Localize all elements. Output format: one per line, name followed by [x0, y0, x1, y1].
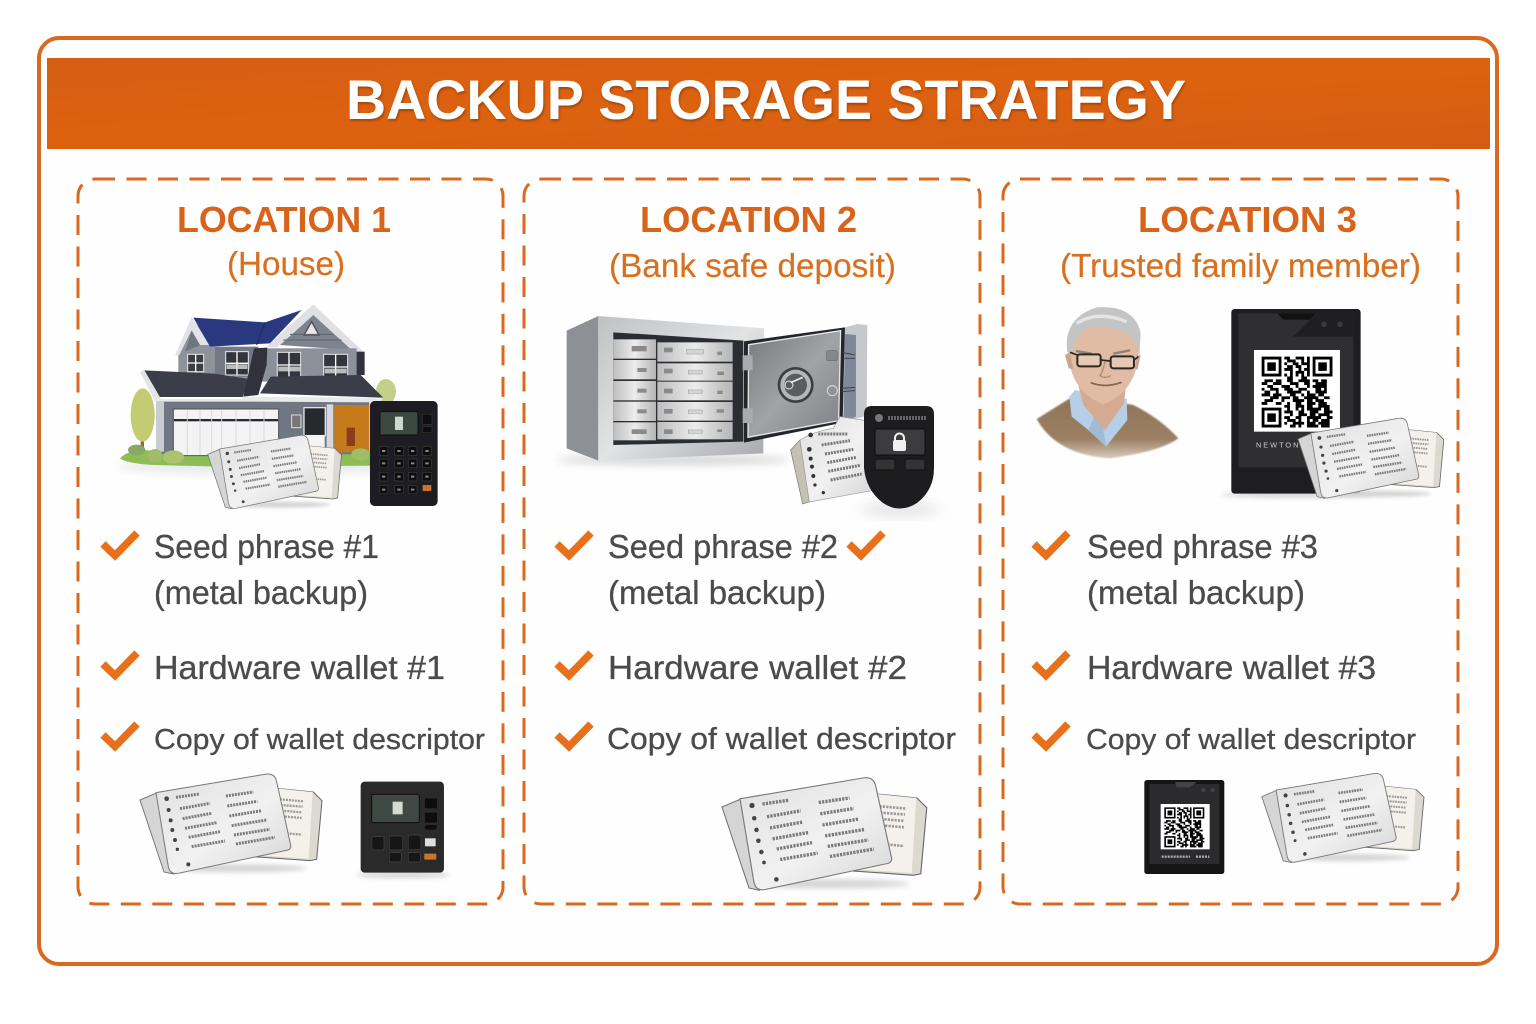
icon: seed phrase card	[1298, 418, 1444, 498]
item: hardware wallet 3: Hardware wallet #3	[1087, 649, 1376, 686]
check	[103, 653, 137, 676]
illustration: house	[117, 304, 403, 475]
icon: hardware wallet keypad	[370, 401, 438, 506]
panel: location 2	[524, 179, 980, 904]
item: seed phrase 2: Seed phrase #2	[608, 528, 838, 565]
device label: NEWTON	[1256, 441, 1300, 450]
icon: hardware wallet small	[357, 782, 450, 878]
heading: location 3: LOCATION 3	[1138, 199, 1357, 240]
extra check	[849, 533, 883, 556]
icon: seed phrase card	[208, 435, 341, 509]
heading: location 1: LOCATION 1	[177, 199, 391, 240]
check	[103, 533, 137, 556]
check	[1034, 724, 1068, 746]
item: hardware wallet 1: Hardware wallet #1	[154, 649, 445, 686]
item note: (metal backup)	[154, 574, 368, 611]
icon: descriptor pages	[140, 774, 322, 874]
icon: descriptor pages	[722, 778, 927, 890]
illustration: safe	[557, 316, 867, 465]
check	[557, 533, 591, 556]
panel: location 3	[1003, 179, 1458, 904]
item: hardware wallet 2: Hardware wallet #2	[608, 649, 907, 686]
check	[1034, 533, 1068, 556]
check	[103, 724, 137, 746]
illustration: older man portrait	[1037, 307, 1178, 458]
title banner	[47, 58, 1490, 149]
icon: shield hardware wallet	[860, 406, 940, 513]
subheading: bank safe deposit: (Bank safe deposit)	[609, 247, 896, 284]
illustration: QR hardware device	[1220, 309, 1373, 498]
item note: (metal backup)	[1087, 574, 1305, 611]
subheading: trusted family member: (Trusted family member)	[1060, 247, 1421, 284]
icon: seed phrase card	[791, 417, 872, 504]
panel: location 1	[78, 179, 503, 904]
check	[557, 724, 591, 746]
item: seed phrase 1: Seed phrase #1	[154, 528, 379, 565]
item: seed phrase 3: Seed phrase #3	[1087, 528, 1318, 565]
checklist: location 3	[1034, 528, 1416, 756]
icon: small QR device	[1144, 780, 1224, 874]
checklist: location 1	[103, 528, 485, 756]
item: descriptor copy: Copy of wallet descriptor	[607, 721, 956, 756]
item: descriptor copy: Copy of wallet descriptor	[154, 724, 485, 756]
item: descriptor copy: Copy of wallet descriptor	[1086, 724, 1416, 756]
check	[1034, 653, 1068, 676]
icon: descriptor pages	[1262, 773, 1424, 863]
check	[557, 653, 591, 676]
heading: location 2: LOCATION 2	[640, 199, 857, 240]
checklist: location 2	[557, 528, 956, 756]
subheading: house: (House)	[227, 245, 345, 282]
item note: (metal backup)	[608, 574, 826, 611]
title: BACKUP STORAGE STRATEGY	[346, 68, 1186, 131]
